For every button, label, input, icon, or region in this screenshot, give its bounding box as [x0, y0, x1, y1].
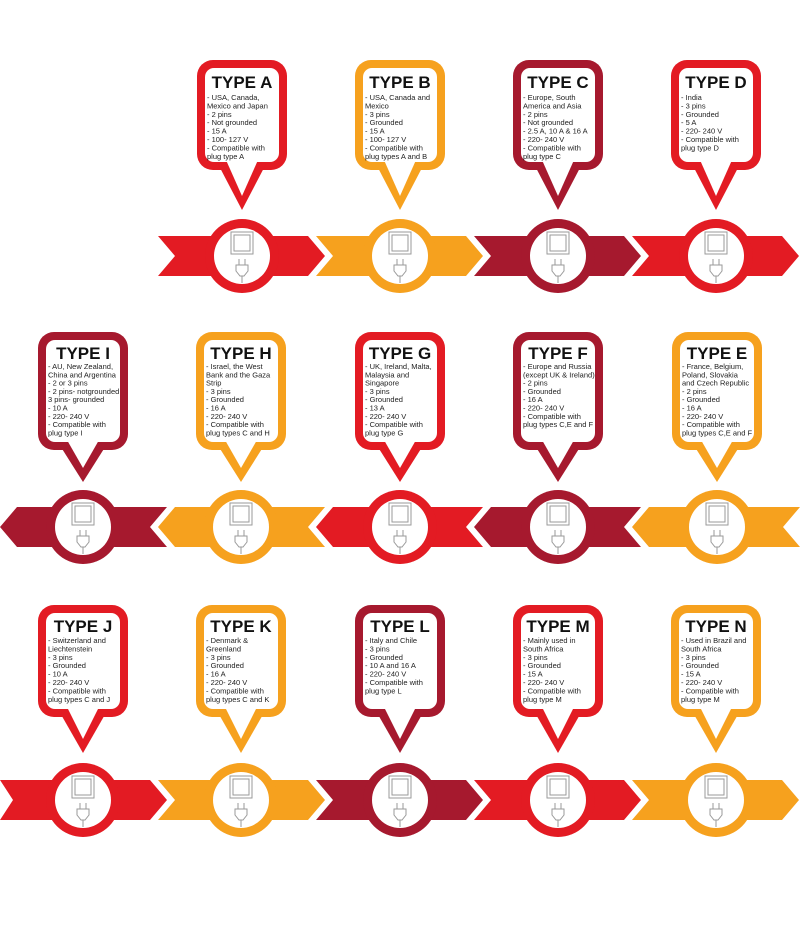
callout: Type E: - Grounded	[682, 395, 720, 404]
callout: Type E: - France, Belgium,	[682, 362, 743, 371]
callout: Type I: China and Argentina	[48, 370, 117, 379]
callout: Type C: - Compatible with	[523, 143, 581, 152]
callout: Type H	[196, 332, 286, 482]
callout: Type D: plug type D	[681, 143, 720, 152]
callout: Type A: TYPE A	[212, 73, 272, 92]
callout: Type G: - Grounded	[365, 395, 403, 404]
callout: Type N: - Compatible with	[681, 686, 739, 695]
callout: Type J: - Compatible with	[48, 686, 106, 695]
callout: Type F	[513, 332, 603, 482]
icon: socket B	[363, 219, 437, 293]
callout: Type H: Bank and the Gaza	[206, 370, 271, 379]
callout: Type A: - 2 pins	[207, 110, 232, 119]
callout: Type H: - Compatible with	[206, 420, 264, 429]
icon: socket N	[679, 763, 753, 837]
callout: Type A: - 100- 127 V	[207, 135, 248, 144]
callout: Type D: - 3 pins	[681, 101, 706, 110]
callout: Type B: - USA, Canada and	[365, 93, 430, 102]
icon: socket E	[680, 490, 754, 564]
callout: Type M: - 15 A	[523, 670, 543, 679]
callout: Type F: plug types C,E and F	[523, 420, 593, 429]
callout: Type B	[355, 60, 445, 210]
callout: Type E: TYPE E	[687, 344, 747, 363]
callout: Type L: - Italy and Chile	[365, 636, 417, 645]
callout: Type B: TYPE B	[369, 73, 431, 92]
callout: Type E: and Czech Republic	[682, 379, 749, 388]
callout: Type I	[38, 332, 128, 482]
callout: Type J: TYPE J	[54, 617, 112, 636]
callout: Type L: - 220- 240 V	[365, 670, 406, 679]
callout: Type N: TYPE N	[685, 617, 747, 636]
callout: Type N: - 220- 240 V	[681, 678, 722, 687]
callout: Type C: America and Asia	[523, 101, 582, 110]
callout: Type M	[513, 605, 603, 753]
icon: socket D	[679, 219, 753, 293]
icon: socket L	[363, 763, 437, 837]
callout: Type E	[672, 332, 762, 482]
callout: Type K: - 220- 240 V	[206, 678, 247, 687]
callout: Type L: - 10 A and 16 A	[365, 661, 416, 670]
callout: Type D: TYPE D	[685, 73, 747, 92]
callout: Type H: - 3 pins	[206, 387, 231, 396]
callout: Type A	[197, 60, 287, 210]
callout: Type D: - Grounded	[681, 110, 719, 119]
callout: Type M: - 3 pins	[523, 653, 548, 662]
icon: socket H	[204, 490, 278, 564]
callout: Type K: - Grounded	[206, 661, 244, 670]
callout: Type N	[671, 605, 761, 753]
callout: Type L: TYPE L	[370, 617, 430, 636]
callout: Type G: Malaysia and	[365, 370, 409, 379]
callout: Type C: - Europe, South	[523, 93, 576, 102]
callout: Type G: - UK, Ireland, Malta,	[365, 362, 432, 371]
icon: socket A	[205, 219, 279, 293]
callout: Type A: - Compatible with	[207, 143, 265, 152]
callout: Type K: - 16 A	[206, 670, 226, 679]
callout: Type K: Greenland	[206, 644, 241, 653]
callout: Type F: (except UK & Ireland)	[523, 370, 595, 379]
callout: Type E: - Compatible with	[682, 420, 740, 429]
callout: Type J: - Grounded	[48, 661, 86, 670]
callout: Type G: - Compatible with	[365, 420, 423, 429]
callout: Type I: - 220- 240 V	[48, 412, 89, 421]
callout: Type I: plug type I	[48, 428, 83, 437]
callout: Type G: Singapore	[365, 379, 399, 388]
callout: Type B: - 15 A	[365, 127, 385, 136]
callout: Type E: - 2 pins	[682, 387, 707, 396]
callout: Type M: plug type M	[523, 695, 562, 704]
callout: Type C: - Not grounded	[523, 118, 573, 127]
callout: Type G: TYPE G	[369, 344, 431, 363]
callout: Type J: - Switzerland and	[48, 636, 106, 645]
callout: Type F: - 2 pins	[523, 379, 548, 388]
callout: Type F: - Grounded	[523, 387, 561, 396]
callout: Type B: - 3 pins	[365, 110, 390, 119]
callout: Type G: - 13 A	[365, 404, 385, 412]
icon: socket C	[521, 219, 595, 293]
callout: Type C: - 2.5 A, 10 A & 16 A	[523, 127, 588, 136]
callout: Type K: - Compatible with	[206, 686, 264, 695]
callout: Type I: - 10 A	[48, 404, 68, 412]
callout: Type H: - 220- 240 V	[206, 412, 247, 421]
callout: Type D: - India	[681, 93, 703, 102]
callout: Type I: - Compatible with	[48, 420, 106, 429]
callout: Type J: - 10 A	[48, 670, 68, 679]
callout: Type L: - Compatible with	[365, 678, 423, 687]
callout: Type K: TYPE K	[210, 617, 272, 636]
callout: Type F: - Europe and Russia	[523, 362, 592, 371]
callout: Type A: - 15 A	[207, 127, 227, 136]
callout: Type A: - USA, Canada,	[207, 93, 260, 102]
callout: Type E: plug types C,E and F	[682, 428, 752, 437]
arrow band row 2	[0, 507, 800, 547]
callout: Type I: TYPE I	[56, 344, 110, 363]
icon: socket J	[46, 763, 120, 837]
callout: Type F: - Compatible with	[523, 412, 581, 421]
callout: Type G	[355, 332, 445, 482]
callout: Type C	[513, 60, 603, 210]
callout: Type N: plug type M	[681, 695, 720, 704]
callout: Type D: - 5 A	[681, 118, 696, 127]
callout: Type K: - 3 pins	[206, 653, 231, 662]
callout: Type M: - Grounded	[523, 661, 561, 670]
callout: Type N: - Grounded	[681, 661, 719, 670]
callout: Type C: TYPE C	[527, 73, 589, 92]
callout: Type I: 3 pins- grounded	[48, 395, 104, 404]
callout: Type A: plug type A	[207, 152, 244, 161]
callout: Type F: - 220- 240 V	[523, 404, 564, 412]
callout: Type H: - 16 A	[206, 404, 226, 412]
callout: Type L	[355, 605, 445, 753]
callout: Type G: - 220- 240 V	[365, 412, 406, 421]
callout: Type G: plug type G	[365, 428, 404, 437]
callout: Type M: TYPE M	[526, 617, 590, 636]
callout: Type I: - AU, New Zealand,	[48, 362, 113, 371]
callout: Type I: - 2 or 3 pins	[48, 379, 88, 388]
icon: socket I	[46, 490, 120, 564]
callout: Type K	[196, 605, 286, 753]
callout: Type B: - 100- 127 V	[365, 135, 406, 144]
icon: socket F	[521, 490, 595, 564]
callout: Type L: - 3 pins	[365, 644, 390, 653]
callout: Type B: plug types A and B	[365, 152, 427, 161]
arrow band row 3	[0, 780, 799, 820]
callout: Type H: plug types C and H	[206, 428, 270, 437]
callout: Type D: - Compatible with	[681, 135, 739, 144]
callout: Type D	[671, 60, 761, 210]
callout: Type K: plug types C and K	[206, 695, 269, 704]
callout: Type A: - Not grounded	[207, 118, 257, 127]
callout: Type E: - 16 A	[682, 404, 702, 412]
callout: Type K: - Denmark &	[206, 636, 248, 645]
callout: Type C: - 2 pins	[523, 110, 548, 119]
callout: Type H: TYPE H	[210, 344, 272, 363]
callout: Type M: - Compatible with	[523, 686, 581, 695]
arrow band row 1	[158, 236, 799, 276]
callout: Type N: - 3 pins	[681, 653, 706, 662]
callout: Type E: - 220- 240 V	[682, 412, 723, 421]
callout: Type J: - 3 pins	[48, 653, 73, 662]
callout: Type L: - Grounded	[365, 653, 403, 662]
callout: Type F: TYPE F	[528, 344, 588, 363]
callout: Type M: - Mainly used in	[523, 636, 576, 645]
callout: Type H: - Israel, the West	[206, 362, 263, 371]
icon: socket M	[521, 763, 595, 837]
callout: Type H: Strip	[206, 379, 221, 388]
callout: Type B: - Compatible with	[365, 143, 423, 152]
icon: socket K	[204, 763, 278, 837]
callout: Type C: plug type C	[523, 152, 562, 161]
callout: Type J	[38, 605, 128, 753]
callout: Type A: Mexico and Japan	[207, 101, 268, 110]
icon: socket G	[363, 490, 437, 564]
callout: Type E: Poland, Slovakia	[682, 370, 739, 379]
callout: Type I: - 2 pins- notgrounded	[48, 387, 119, 396]
callout: Type J: - 220- 240 V	[48, 678, 89, 687]
callout: Type M: - 220- 240 V	[523, 678, 564, 687]
callout: Type C: - 220- 240 V	[523, 135, 564, 144]
callout: Type F: - 16 A	[523, 395, 543, 404]
callout: Type G: - 3 pins	[365, 387, 390, 396]
callout: Type J: plug types C and J	[48, 695, 110, 704]
callout: Type J: Liechtenstein	[48, 644, 92, 653]
callout: Type N: - Used in Brazil and	[681, 636, 746, 645]
callout: Type N: - 15 A	[681, 670, 701, 679]
callout: Type B: Mexico	[365, 101, 389, 110]
callout: Type B: - Grounded	[365, 118, 403, 127]
callout: Type H: - Grounded	[206, 395, 244, 404]
callout: Type D: - 220- 240 V	[681, 127, 722, 136]
callout: Type M: South Africa	[523, 644, 564, 653]
callout: Type N: South Africa	[681, 644, 722, 653]
callout: Type L: plug type L	[365, 686, 402, 695]
